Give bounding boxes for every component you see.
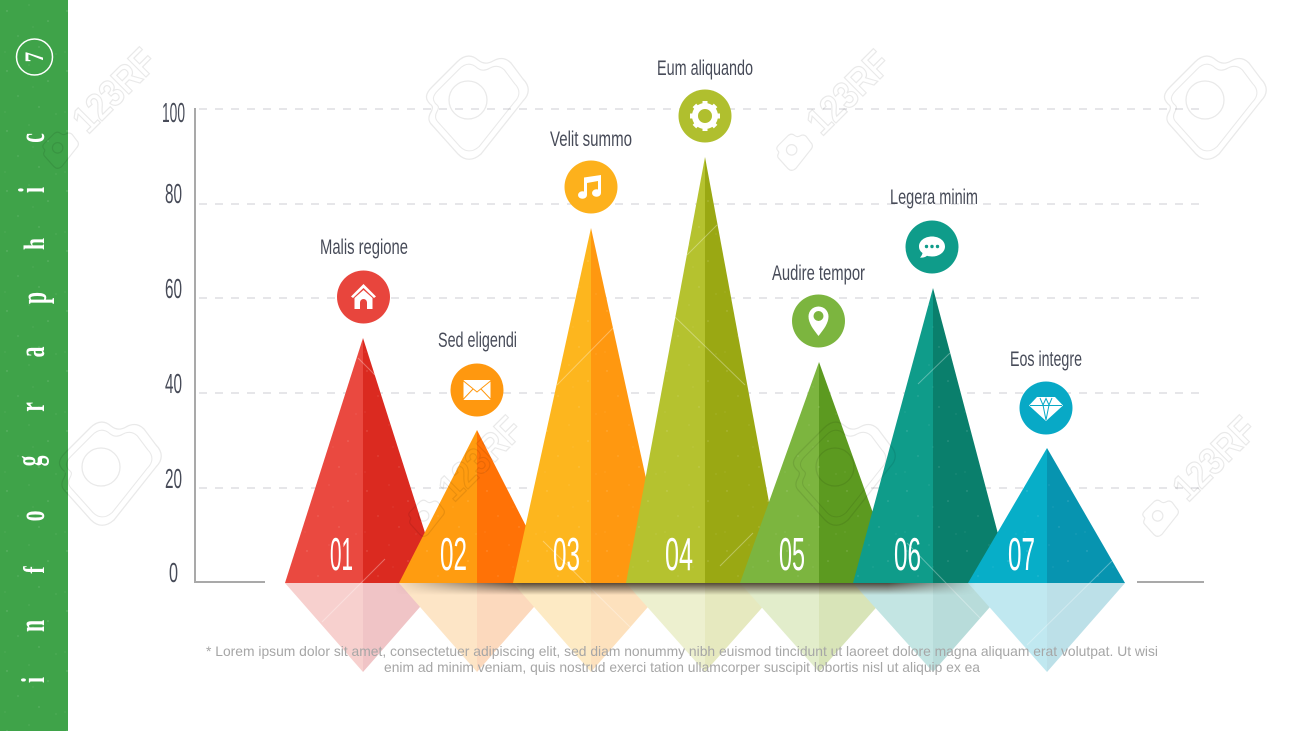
category labels: Eum aliquando — [657, 57, 753, 80]
sidebar number badge — [16, 39, 52, 75]
y axis labels: 80 — [165, 178, 182, 209]
pyramid numbers — [330, 528, 1035, 580]
icon: gear — [678, 90, 732, 142]
y axis labels: 40 — [165, 368, 182, 399]
sidebar vertical title: i — [11, 187, 53, 193]
icon: diamond — [1020, 382, 1072, 434]
y axis labels: 0 — [169, 557, 178, 588]
watermarks: 123RF — [799, 43, 899, 143]
sidebar vertical title: i — [16, 677, 52, 683]
sidebar vertical title: g — [8, 456, 50, 466]
icon: speech bubble — [906, 220, 958, 274]
pyramid numbers: 05 — [779, 528, 805, 580]
y axis labels — [162, 97, 185, 588]
icon: music note — [564, 160, 618, 214]
category labels: Sed eligendi — [438, 329, 517, 352]
sidebar vertical title — [8, 133, 55, 683]
chart axes and gridlines: 100 — [162, 97, 185, 128]
pyramid 05 — [740, 362, 898, 583]
pyramid 03 — [513, 228, 669, 583]
sidebar vertical title: a — [11, 347, 53, 357]
reflections of the pyramids — [285, 583, 1125, 672]
y axis labels: 60 — [165, 273, 182, 304]
sidebar vertical title: n — [11, 620, 53, 632]
category labels: Velit summo — [550, 128, 632, 151]
watermarks: 123RF — [65, 41, 165, 141]
category labels: Legera minim — [890, 186, 978, 209]
chart axes and gridlines — [162, 97, 1204, 588]
pyramid numbers: 06 — [894, 528, 921, 580]
pyramid numbers: 03 — [553, 528, 580, 580]
sidebar vertical title: p — [13, 292, 55, 304]
pyramid numbers: 02 — [440, 528, 467, 580]
icon: map pin — [792, 294, 845, 348]
watermarks — [43, 41, 1266, 536]
pyramid 04 — [626, 157, 784, 583]
sidebar vertical title: r — [11, 402, 53, 412]
watermarks: 123RF — [431, 409, 531, 509]
sidebar vertical title: o — [11, 511, 53, 521]
pyramid 06 — [853, 288, 1011, 583]
pyramid numbers: 07 — [1008, 528, 1035, 580]
pyramid 07 — [968, 448, 1125, 583]
pyramid 01 — [285, 338, 441, 583]
icon: home — [337, 270, 390, 324]
sidebar vertical title: h — [18, 238, 51, 250]
pyramid numbers: 01 — [330, 528, 353, 580]
watermarks: 123RF — [1165, 409, 1265, 509]
sidebar — [0, 0, 68, 731]
sidebar number badge: 7 — [21, 52, 50, 62]
icon: envelope — [450, 364, 504, 416]
sidebar vertical title: c — [11, 133, 53, 143]
pyramid numbers: 04 — [665, 528, 693, 580]
footnote: * Lorem ipsum dolor sit amet, consectetuer adipiscing elit, sed diam nonummy nibh euismod tincidunt ut laoreet dolore magna aliquam erat volutpat. Ut wisi — [206, 643, 1158, 659]
footnote: enim ad minim veniam, quis nostrud exerci tation ullamcorper suscipit lobortis nisl ut aliquip ex ea — [384, 659, 980, 675]
footnote — [206, 643, 1158, 675]
pyramid 02 — [399, 430, 555, 583]
y axis labels: 20 — [165, 463, 182, 494]
category labels: Audire tempor — [772, 262, 865, 285]
sidebar vertical title: f — [18, 566, 51, 574]
category labels — [320, 57, 1082, 371]
category labels: Eos integre — [1010, 348, 1082, 371]
category labels: Malis regione — [320, 236, 408, 259]
